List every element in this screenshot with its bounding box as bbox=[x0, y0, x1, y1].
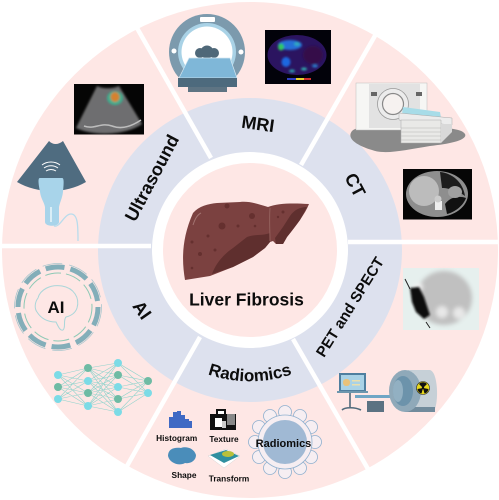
icon: MRI scanner bbox=[169, 14, 245, 92]
label: CT: CT bbox=[341, 170, 369, 200]
label: Transform: Transform bbox=[209, 474, 249, 484]
icon: radiomics tumor bbox=[248, 406, 322, 478]
icon: texture bbox=[210, 409, 236, 430]
label: Radiomics: Radiomics bbox=[208, 364, 291, 382]
icon: ultrasound probe bbox=[17, 141, 86, 241]
image: ultrasound scan bbox=[74, 84, 144, 134]
label: Histogram: Histogram bbox=[156, 433, 197, 443]
chart: neural network bbox=[54, 359, 152, 416]
label: AI: AI bbox=[129, 297, 155, 323]
label: Texture: Texture bbox=[209, 434, 239, 444]
icon: liver bbox=[183, 202, 309, 280]
label: MRI: MRI bbox=[240, 112, 276, 136]
icon: AI brain rings: AI bbox=[48, 298, 64, 317]
blue label ring bbox=[98, 98, 402, 402]
image: PET scan bbox=[403, 268, 479, 330]
center pink disc bbox=[163, 163, 337, 337]
title: Liver Fibrosis: Liver Fibrosis bbox=[189, 290, 304, 310]
icon: shape bbox=[168, 447, 196, 464]
icon: transform bbox=[208, 449, 240, 468]
icon: PET scanner bbox=[337, 370, 437, 412]
icon: AI brain rings bbox=[14, 264, 102, 350]
label: Shape: Shape bbox=[172, 470, 197, 480]
label: PET and SPECT: PET and SPECT bbox=[313, 254, 388, 360]
icon: CT scanner bbox=[350, 83, 465, 152]
image: MRI liver map bbox=[265, 30, 331, 84]
icon: radiomics tumor: Radiomics bbox=[256, 438, 311, 450]
label: Ultrasound: Ultrasound bbox=[121, 131, 183, 225]
icon: histogram bbox=[169, 411, 192, 428]
white inner ring bbox=[152, 152, 348, 348]
image: CT scan bbox=[403, 169, 472, 220]
